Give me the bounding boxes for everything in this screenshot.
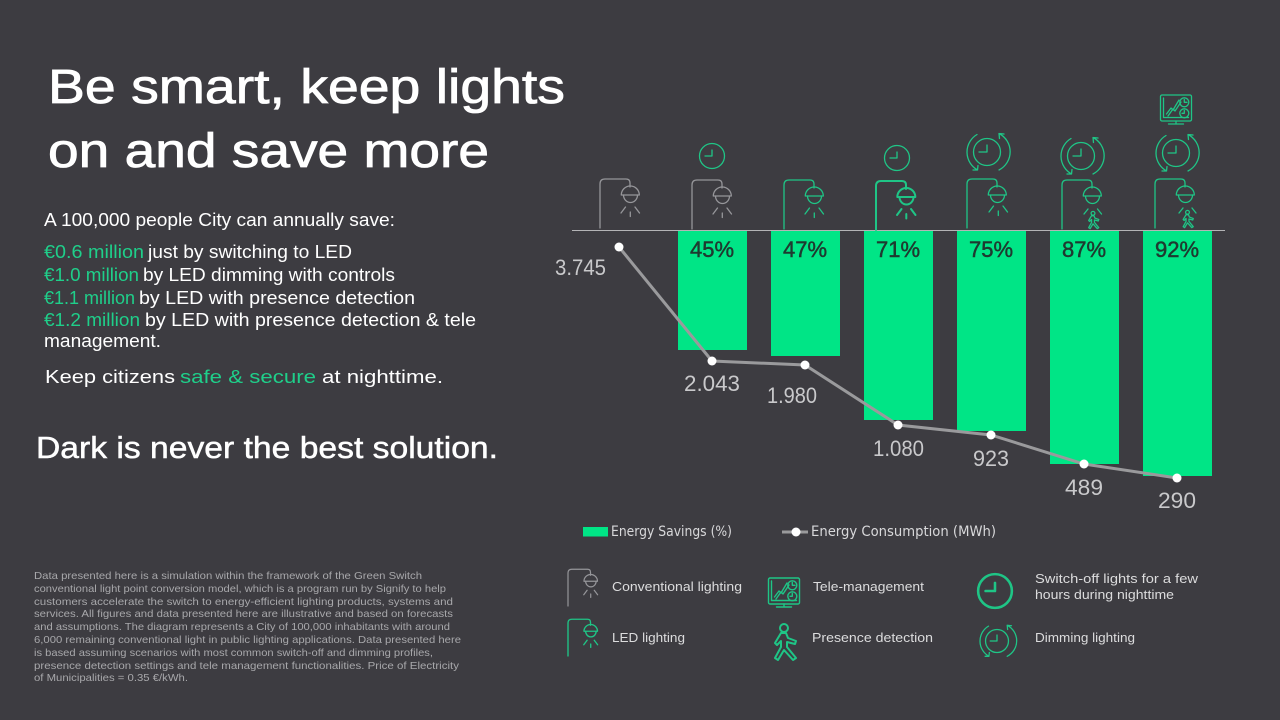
text block: annual savings: A 100,000 people City can annually save: xyxy=(44,210,395,230)
key: presence detection: Presence detection xyxy=(812,630,933,645)
line: energy consumption xyxy=(614,242,1182,482)
legend: icon key xyxy=(568,569,1199,660)
text block: safety message: at nighttime. xyxy=(322,367,443,387)
key: conventional lighting xyxy=(568,569,742,606)
footnote xyxy=(34,570,461,684)
footnote: and assumptions. The diagram represents a City of 100,000 inhabitants with around xyxy=(34,621,450,633)
bar percentages: 87% xyxy=(1062,237,1106,262)
text block: annual savings: management. xyxy=(44,331,161,351)
legend item: energy savings: Energy Savings (%) xyxy=(611,524,732,540)
text block: annual savings: €1.2 million xyxy=(44,310,140,330)
bar percentages: 75% xyxy=(969,237,1013,262)
bar percentages: 92% xyxy=(1155,237,1199,262)
consumption values: 1.980 xyxy=(767,383,817,408)
consumption values xyxy=(555,255,1196,513)
key: dimming lighting: Dimming lighting xyxy=(1035,630,1135,645)
baseline xyxy=(572,230,1225,232)
text block: annual savings: €1.1 million xyxy=(44,288,135,308)
key: tele-management xyxy=(768,578,924,607)
text block: annual savings: by LED with presence detection xyxy=(139,288,415,308)
consumption values: 489 xyxy=(1065,475,1103,500)
footnote: customers accelerate the switch to energy-efficient lighting products, systems and xyxy=(34,596,453,608)
chart: energy savings bars and consumption line xyxy=(555,230,1225,513)
title: on and save more xyxy=(48,125,489,178)
key: LED lighting xyxy=(568,619,685,656)
bar percentages: 47% xyxy=(783,237,827,262)
text block: safety message xyxy=(45,367,443,387)
icon: scenario 5 LED lamp with dimming xyxy=(967,134,1010,228)
legend: chart series xyxy=(583,524,996,540)
key: switch-off xyxy=(978,571,1199,608)
title xyxy=(48,61,565,178)
bars: energy savings xyxy=(678,231,1212,476)
footnote: 6,000 remaining conventional light in public lighting applications. Data presented here xyxy=(34,634,461,646)
slogan: Dark is never the best solution. xyxy=(36,430,498,465)
key: switch-off: hours during nighttime xyxy=(1035,587,1174,602)
key: LED lighting: LED lighting xyxy=(612,630,685,645)
icon: scenario 3 LED lamp xyxy=(784,180,824,229)
icon: scenario 7 LED lamp with dimming, presence detection and tele-management xyxy=(1155,95,1199,228)
consumption values: 290 xyxy=(1158,488,1196,513)
icon: scenario 6 LED lamp with dimming and presence detection xyxy=(1061,138,1104,229)
text block: annual savings: by LED with presence detection & tele xyxy=(145,310,476,330)
icon: scenario 2 conventional lamp with switch-off clock xyxy=(692,144,732,229)
footnote: presence detection settings and tele management functionalities. Price of Electricity xyxy=(34,660,460,672)
consumption values: 3.745 xyxy=(555,255,606,280)
consumption values: 1.080 xyxy=(873,436,924,461)
footnote: is based assuming scenarios with most common switch-off and dimming profiles, xyxy=(34,647,433,659)
key: conventional lighting: Conventional lighting xyxy=(612,579,742,594)
key: dimming lighting xyxy=(980,625,1135,656)
text block: safety message: safe & secure xyxy=(180,367,316,387)
text block: annual savings: €0.6 million xyxy=(44,242,144,262)
key: switch-off: Switch-off lights for a few xyxy=(1035,571,1199,586)
text block: annual savings: €1.0 million xyxy=(44,265,139,285)
key: presence detection xyxy=(775,624,933,660)
text block: annual savings: by LED dimming with controls xyxy=(143,265,395,285)
consumption values: 2.043 xyxy=(684,371,740,396)
text block: annual savings xyxy=(44,210,476,351)
icon: scenario 1 conventional lamp xyxy=(600,179,640,228)
consumption values: 923 xyxy=(973,446,1009,471)
key: tele-management: Tele-management xyxy=(813,579,924,594)
footnote: of Municipalities = 0.35 €/kWh. xyxy=(34,672,188,684)
bar percentages: 45% xyxy=(690,237,734,262)
bar percentages xyxy=(690,237,1199,262)
title: Be smart, keep lights xyxy=(48,61,565,114)
footnote: conventional light point conversion model, which is a program run by Signify to help xyxy=(34,583,446,595)
legend item: energy consumption: Energy Consumption (MWh) xyxy=(811,524,996,540)
text block: annual savings: just by switching to LED xyxy=(147,242,352,262)
text block: safety message: Keep citizens xyxy=(45,367,175,387)
icon: scenario 4 LED lamp with switch-off clock xyxy=(876,146,916,230)
bar percentages: 71% xyxy=(876,237,920,262)
footnote: Data presented here is a simulation within the framework of the Green Switch xyxy=(34,570,422,582)
footnote: services. All figures and data presented here are illustrative and based on forecasts xyxy=(34,608,453,620)
